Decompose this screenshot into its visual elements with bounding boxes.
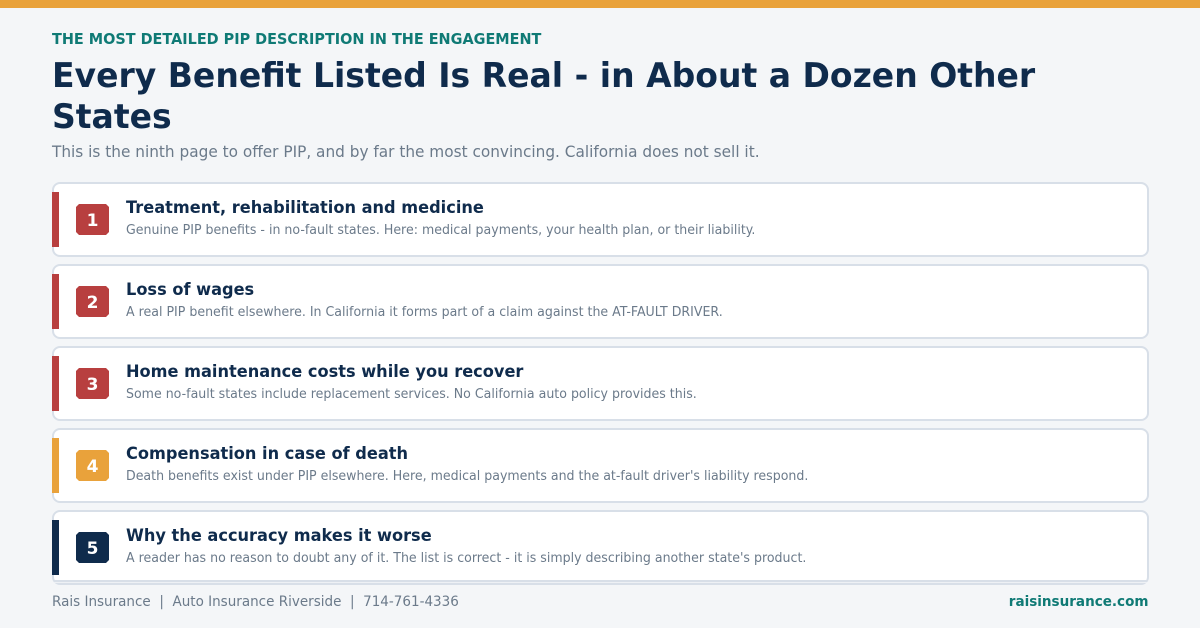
heading 5: Why the accuracy makes it worse (126, 526, 432, 546)
badge 3 (76, 368, 109, 399)
badge 1 (76, 204, 109, 235)
panel: item 5 (52, 510, 1149, 585)
badge 4 (76, 450, 109, 481)
top accent band (0, 0, 1200, 8)
heading 3: Home maintenance costs while you recover (126, 362, 523, 382)
text 1: Genuine PIP benefits - in no-fault states. Here: medical payments, your health plan, or their liability. (126, 223, 755, 238)
heading 4: Compensation in case of death (126, 444, 408, 464)
title: Every Benefit Listed Is Real - in About a Dozen Other States (52, 56, 1035, 137)
panel: item 4 (52, 428, 1149, 503)
panel: item 2 (52, 264, 1149, 339)
badge 5 (76, 532, 109, 563)
footer website: raisinsurance.com (1008, 594, 1148, 610)
badge 4: 4 (87, 457, 98, 477)
heading 1: Treatment, rehabilitation and medicine (126, 198, 484, 218)
heading 2: Loss of wages (126, 280, 254, 300)
badge 1: 1 (87, 211, 98, 231)
text 4: Death benefits exist under PIP elsewhere. Here, medical payments and the at-fault driver's liability respond. (126, 469, 808, 484)
subtitle: This is the ninth page to offer PIP, and by far the most convincing. California does not sell it. (52, 142, 760, 161)
badge 3: 3 (87, 375, 98, 395)
text 2: A real PIP benefit elsewhere. In California it forms part of a claim against the AT-FAULT DRIVER. (126, 305, 723, 320)
eyebrow heading: THE MOST DETAILED PIP DESCRIPTION IN THE ENGAGEMENT (52, 30, 541, 48)
badge 2: 2 (87, 293, 98, 313)
footer left text: Rais Insurance | Auto Insurance Riverside | 714-761-4336 (52, 594, 459, 610)
panel: item 3 (52, 346, 1149, 421)
panel: item 1 (52, 182, 1149, 257)
badge 2 (76, 286, 109, 317)
badge 5: 5 (87, 539, 98, 559)
text 5: A reader has no reason to doubt any of it. The list is correct - it is simply describing another state's product. (126, 551, 806, 566)
text 3: Some no-fault states include replacement services. No California auto policy provides this. (126, 387, 697, 402)
